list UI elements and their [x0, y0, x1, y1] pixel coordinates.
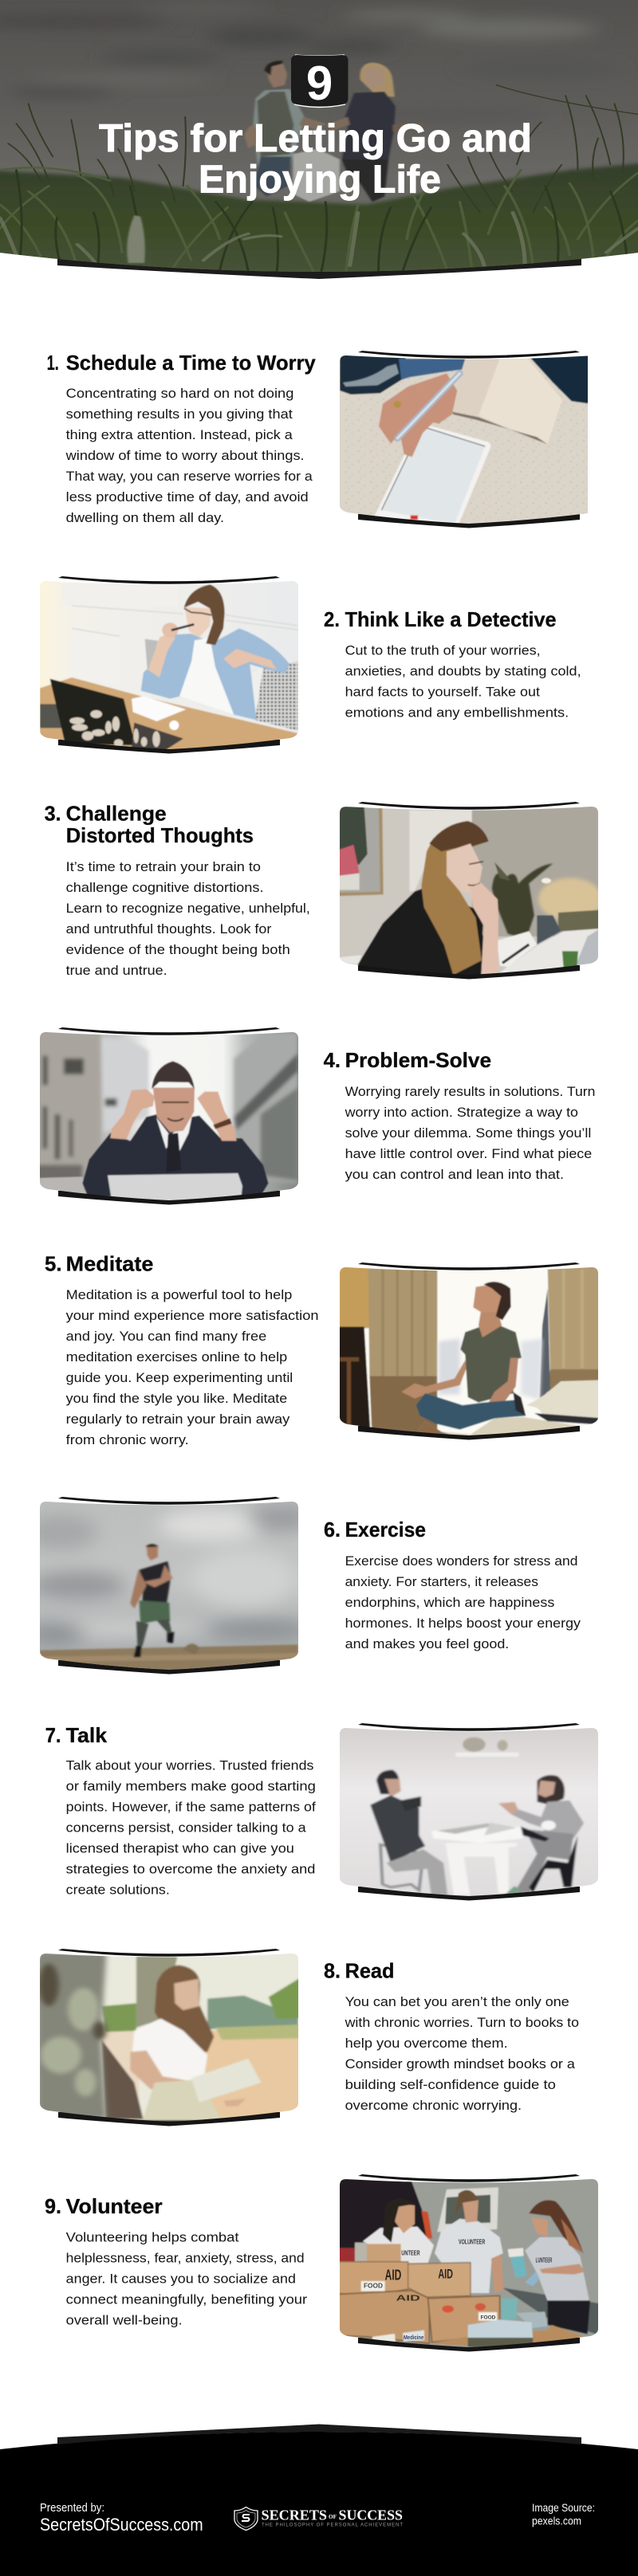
image source — [532, 2502, 595, 2527]
tip 5 body text: and joy. You can find many free — [66, 1329, 266, 1344]
tip 8 photo: woman holding a book outdoors — [37, 1949, 301, 2126]
tip 3 heading — [45, 802, 254, 847]
tip 3 body text: evidence of the thought being both — [66, 942, 290, 957]
tip 6 photo: man running under cloudy sky — [40, 1497, 298, 1674]
tip 7 heading: Talk — [66, 1723, 108, 1747]
tip 8 body text: Consider growth mindset books or a — [345, 2056, 575, 2071]
tip 1 body text: That way, you can reserve worries for a — [66, 469, 313, 484]
tip 5 body text: regularly to retrain your brain away — [66, 1412, 290, 1427]
title: Tips for Letting Go and — [99, 117, 532, 160]
tip 9 photo: volunteers packing aid boxes: FOOD — [481, 2315, 495, 2320]
tip 4 heading: Problem-Solve — [345, 1048, 491, 1072]
tip 3 heading: 3. — [45, 802, 61, 826]
tip 7 photo: two women talking at white table — [333, 1723, 606, 1906]
tip 2: think like a detective — [37, 576, 581, 755]
tip 9 photo: volunteers packing aid boxes: Medicine — [404, 2334, 423, 2341]
tip 4 body text: worry into action. Strategize a way to — [345, 1105, 578, 1120]
tip 1 heading: 1. — [47, 351, 59, 375]
tip 3 photo: woman with hand on chin — [335, 802, 606, 982]
logo: secrets of success: OF — [329, 2514, 337, 2520]
tip 5 body text: guide you. Keep experimenting until — [66, 1370, 293, 1385]
tip 9 heading: Volunteer — [66, 2194, 163, 2218]
tip 7 body text: strategies to overcome the anxiety and — [66, 1862, 315, 1876]
tip 4 photo: frustrated man with fists at laptop — [37, 1027, 303, 1208]
tip 8 body text: overcome chronic worrying. — [345, 2098, 522, 2113]
tip 2 body text: anxieties, and doubts by stating cold, — [345, 663, 581, 678]
tip 5 heading: 5. — [45, 1252, 62, 1276]
tip 7 body text: licensed therapist who can give you — [66, 1841, 294, 1855]
tip 6 heading: Exercise — [345, 1518, 426, 1541]
tip 8 body text: You can bet you aren’t the only one — [345, 1994, 569, 2009]
tip 9 photo: volunteers packing aid boxes: AID — [396, 2294, 420, 2303]
tip 7 body text: create solutions. — [66, 1883, 170, 1897]
logo: secrets of success: SUCCESS — [338, 2507, 403, 2523]
tip 7 body text: concerns persist, consider talking to a — [66, 1820, 306, 1835]
tip 9 body text: Volunteering helps combat — [66, 2230, 239, 2245]
presented by — [40, 2502, 203, 2535]
tip 8 body text: building self-confidence guide to — [345, 2077, 556, 2092]
tip 1 body text: less productive time of day, and avoid — [66, 489, 309, 505]
tip 1 body text — [65, 386, 313, 525]
tip 5 body text — [66, 1287, 318, 1447]
tip 2 heading: Think Like a Detective — [345, 607, 557, 631]
tip 3 body text: Learn to recognize negative, unhelpful, — [66, 901, 310, 916]
tip 7 heading: 7. — [45, 1723, 61, 1747]
tip 9 photo: volunteers packing aid boxes: LUNTEER — [536, 2257, 552, 2264]
tip 9 body text: overall well-being. — [66, 2313, 183, 2328]
tip 9 photo: volunteers packing aid boxes — [335, 2174, 606, 2354]
tip 4 heading: 4. — [324, 1048, 341, 1072]
tip 4 body text: Worrying rarely results in solutions. Turn — [345, 1084, 595, 1099]
tip 7 heading — [45, 1723, 108, 1747]
grass blades — [0, 85, 638, 273]
tip 3 heading: Distorted Thoughts — [66, 823, 254, 847]
tip 6 body text: hormones. It helps boost your energy — [345, 1616, 581, 1631]
tip 1 heading: Schedule a Time to Worry — [66, 351, 316, 375]
badge number: 9 — [306, 57, 333, 110]
logo: secrets of success: SECRETS — [262, 2507, 327, 2523]
tip 9 photo: volunteers packing aid boxes: AID — [385, 2266, 401, 2283]
man — [244, 61, 325, 197]
tip 1 body text: thing extra attention. Instead, pick a — [66, 427, 293, 442]
footer background — [0, 2432, 638, 2576]
presented by: Presented by: — [40, 2502, 104, 2515]
tip 9 body text: anger. It causes you to socialize and — [66, 2272, 296, 2287]
tip 1 body text: dwelling on them all day. — [66, 510, 224, 525]
tip 2 photo: woman thinking at desk with laptop — [37, 576, 303, 755]
tip 3 body text — [66, 859, 310, 978]
tip 2 body text: emotions and any embellishments. — [345, 705, 569, 720]
tip 6 body text: and makes you feel good. — [345, 1636, 509, 1651]
tip 7 body text: or family members make good starting — [66, 1779, 316, 1793]
title: Enjoying Life — [199, 158, 441, 201]
tip 9 heading: 9. — [45, 2194, 61, 2218]
tip 1 body text: window of time to worry about things. — [65, 448, 305, 463]
image source: pexels.com — [532, 2515, 581, 2527]
tip 8 heading: Read — [345, 1959, 394, 1983]
tip 9 photo: volunteers packing aid boxes: FOOD — [364, 2283, 383, 2290]
presented by: SecretsOfSuccess.com — [40, 2515, 203, 2535]
tip 1 photo: hand with pen over tablet and notebook — [335, 351, 601, 532]
tip 5 body text: your mind experience more satisfaction — [66, 1308, 318, 1323]
tip 9 photo: volunteers packing aid boxes: VOLUNTEER — [459, 2237, 486, 2245]
tip 9: volunteer — [45, 2174, 606, 2354]
tip 4 body text: have little control over. Find what piece — [345, 1146, 592, 1161]
tip 1: schedule a time to worry — [47, 351, 601, 532]
footer — [0, 2425, 638, 2576]
tip 2 body text: hard facts to yourself. Take out — [345, 684, 540, 699]
tip 5: meditate — [45, 1252, 606, 1447]
tip 8 body text: help you overcome them. — [345, 2036, 508, 2051]
tip 8 body text — [345, 1994, 579, 2113]
icon: shield — [234, 2507, 258, 2530]
tip 5 body text: meditation exercises online to help — [66, 1349, 287, 1365]
logo: secrets of success: THE PHILOSOPHY OF PERSONAL ACHIEVEMENT — [262, 2523, 403, 2528]
tip 8: read — [37, 1949, 579, 2126]
tip 4 body text — [345, 1084, 595, 1182]
tip 3 body text: It’s time to retrain your brain to — [66, 859, 261, 874]
logo: secrets of success — [234, 2507, 403, 2530]
tip 2 heading: 2. — [324, 607, 340, 631]
tip 8 body text: with chronic worries. Turn to books to — [345, 2015, 579, 2030]
tip 5 heading: Meditate — [66, 1252, 153, 1276]
tip 7: talk — [45, 1723, 606, 1906]
tip 4 body text: you can control and lean into that. — [345, 1167, 564, 1182]
number badge — [291, 55, 348, 110]
tip 9 photo: volunteers packing aid boxes: UNTEER — [401, 2249, 420, 2257]
tip 9 body text: helplessness, fear, anxiety, stress, and — [66, 2251, 305, 2266]
tip 3: challenge distorted thoughts — [45, 802, 606, 982]
tip 3 heading: Challenge — [66, 802, 167, 826]
tip 3 body text: true and untrue. — [66, 963, 167, 978]
tip 4: problem-solve — [37, 1027, 595, 1208]
tip 1 body text: something results in you giving that — [66, 406, 293, 422]
tip 6 heading: 6. — [324, 1518, 341, 1541]
header photo: couple running through tall grass — [0, 0, 638, 297]
woman — [293, 62, 423, 202]
tip 6: exercise — [25, 1497, 581, 1674]
tip 7 body text — [66, 1758, 316, 1897]
tip 6 body text — [345, 1553, 581, 1651]
tip 6 body text: anxiety. For starters, it releases — [345, 1574, 538, 1589]
footer top dark shape — [57, 2425, 581, 2444]
tip 3 body text: challenge cognitive distortions. — [66, 880, 264, 895]
header dark base shape — [57, 257, 581, 279]
tip 8 heading: 8. — [324, 1959, 341, 1983]
tip 2 body text — [345, 642, 581, 720]
tip 5 body text: from chronic worry. — [66, 1432, 189, 1447]
tip 8 heading — [324, 1959, 394, 1983]
tip 5 body text: Meditation is a powerful tool to help — [66, 1287, 292, 1302]
tip 9 body text: connect meaningfully, benefiting your — [66, 2292, 308, 2307]
header banner — [0, 0, 638, 297]
title — [99, 117, 532, 201]
tip 6 body text: endorphins, which are happiness — [345, 1595, 554, 1610]
tip 4 body text: solve your dilemma. Some things you’ll — [345, 1125, 591, 1141]
tip 7 body text: points. However, if the same patterns of — [66, 1800, 316, 1814]
image source: Image Source: — [532, 2502, 595, 2514]
tip 5 photo: woman meditating on bed — [335, 1262, 606, 1443]
tip 9 photo: volunteers packing aid boxes: AID — [438, 2267, 453, 2282]
tip 6 body text: Exercise does wonders for stress and — [345, 1553, 577, 1569]
tip 9 body text — [66, 2230, 308, 2328]
tip 1 body text: Concentrating so hard on not doing — [66, 386, 293, 401]
tip 7 body text: Talk about your worries. Trusted friends — [66, 1758, 313, 1773]
tip 5 body text: you find the style you like. Meditate — [66, 1391, 287, 1406]
tip 2 body text: Cut to the truth of your worries, — [345, 642, 541, 658]
tip 3 body text: and untruthful thoughts. Look for — [66, 921, 272, 937]
